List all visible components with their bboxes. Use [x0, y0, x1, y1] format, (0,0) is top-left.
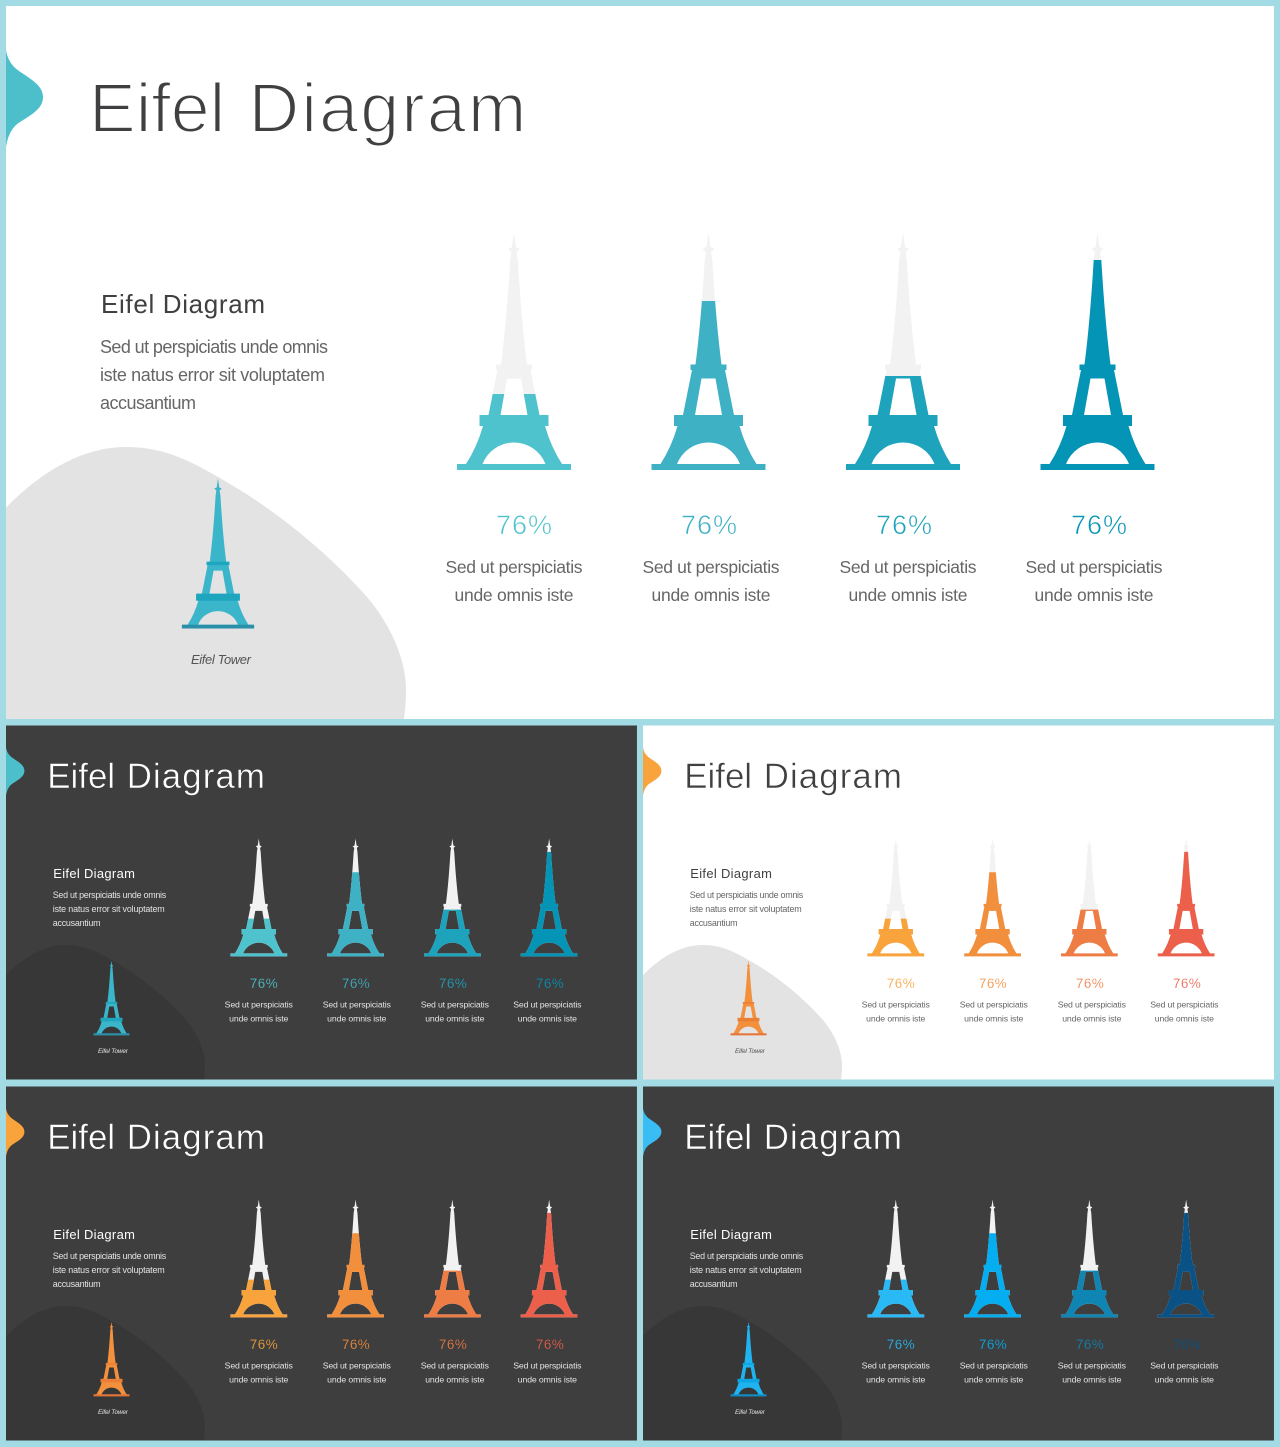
background blob [640, 1306, 842, 1444]
tower labels: unde omnis iste [1155, 1375, 1214, 1385]
tower labels [225, 1002, 582, 1022]
subheading: Eifel Diagram [690, 1227, 772, 1242]
values: 76% [681, 510, 737, 540]
values: 76% [887, 1337, 915, 1352]
tower labels: Sed ut perspiciatis [225, 1361, 294, 1371]
tower labels: unde omnis iste [229, 1014, 289, 1024]
title: Eifel Diagram [47, 1118, 266, 1157]
tower 2 [652, 233, 766, 470]
description text: iste natus error sit voluptatem [690, 1265, 802, 1275]
tower labels: unde omnis iste [518, 1375, 577, 1385]
title: Eifel Diagram [684, 757, 903, 796]
tower labels: Sed ut perspiciatis [323, 1361, 392, 1371]
values: 76% [1071, 510, 1127, 540]
description text: Sed ut perspiciatis unde omnis [690, 890, 804, 900]
tower labels: unde omnis iste [652, 585, 770, 605]
tower labels: Sed ut perspiciatis [1058, 1361, 1127, 1371]
tower labels: Sed ut perspiciatis [225, 1000, 294, 1010]
tower 2 [964, 838, 1021, 956]
tower 2 [327, 838, 384, 956]
description text: iste natus error sit voluptatem [100, 365, 325, 385]
tower labels: unde omnis iste [1034, 585, 1154, 605]
tower 4 [1040, 233, 1154, 470]
tower 1 [230, 1199, 287, 1317]
icon: small tower [94, 1322, 129, 1396]
panel: white orange slide [640, 726, 1274, 1083]
values: 76% [439, 976, 467, 991]
icon: small tower [182, 478, 254, 629]
description text: accusantium [690, 1279, 738, 1289]
icon: small tower [731, 961, 766, 1035]
subheading: Eifel Diagram [53, 1227, 135, 1242]
tower labels: Sed ut perspiciatis [1150, 1000, 1219, 1010]
tower 1 [457, 233, 571, 470]
tower labels: Sed ut perspiciatis [862, 1000, 931, 1010]
tower labels: unde omnis iste [964, 1375, 1024, 1385]
tower labels [862, 1000, 1219, 1024]
description text [100, 337, 328, 413]
panel: dark orange slide [3, 1086, 637, 1444]
tower labels: unde omnis iste [425, 1014, 485, 1024]
caption: Eifel Tower [98, 1048, 129, 1055]
background blob [640, 945, 842, 1083]
tower labels [446, 560, 1162, 601]
tower labels: Sed ut perspiciatis [421, 1000, 490, 1010]
subheading: Eifel Diagram [101, 289, 265, 319]
tower labels: Sed ut perspiciatis [862, 1361, 931, 1371]
tower 2 [327, 1199, 384, 1317]
tower labels [225, 1361, 582, 1385]
title: Eifel Diagram [89, 69, 529, 147]
tower labels: unde omnis iste [327, 1014, 387, 1024]
description text [53, 1251, 167, 1289]
values: 76% [536, 1337, 564, 1352]
background blob [0, 447, 406, 725]
notch tab [6, 1108, 24, 1157]
description text [690, 1251, 804, 1289]
icon: small tower [94, 961, 129, 1035]
tower 3 [424, 1199, 481, 1317]
values [250, 1337, 564, 1352]
values: 76% [342, 1337, 370, 1352]
tower labels: Sed ut perspiciatis [840, 557, 977, 577]
description text: Sed ut perspiciatis unde omnis [53, 890, 167, 900]
tower 1 [867, 1199, 924, 1317]
tower 1 [867, 838, 924, 956]
tower labels: unde omnis iste [866, 1375, 926, 1385]
notch tab [6, 747, 24, 796]
tower labels: Sed ut perspiciatis [1150, 1361, 1219, 1371]
tower 4 [521, 1199, 577, 1317]
values: 76% [342, 976, 370, 991]
tower labels: Sed ut perspiciatis [1058, 1000, 1127, 1010]
values: 76% [1173, 976, 1201, 991]
tower labels: unde omnis iste [454, 585, 574, 605]
tower labels: Sed ut perspiciatis [1026, 557, 1163, 577]
values [887, 1337, 1201, 1352]
values: 76% [439, 1337, 467, 1352]
values: 76% [1076, 1337, 1104, 1352]
values [887, 976, 1201, 991]
tower labels: unde omnis iste [327, 1375, 387, 1385]
tower labels: unde omnis iste [518, 1014, 577, 1024]
tower 3 [1061, 838, 1118, 956]
tower 1 [230, 838, 287, 956]
tower 4 [521, 838, 577, 956]
tower labels: unde omnis iste [1155, 1014, 1214, 1024]
subheading: Eifel Diagram [690, 866, 772, 881]
tower 3 [424, 838, 481, 956]
description text: iste natus error sit voluptatem [53, 904, 165, 914]
description text: accusantium [690, 918, 738, 928]
description text: accusantium [53, 1279, 101, 1289]
values: 76% [979, 1337, 1007, 1352]
tower labels: Sed ut perspiciatis [960, 1361, 1029, 1371]
values: 76% [496, 510, 552, 540]
description text: accusantium [53, 918, 101, 928]
tower labels: Sed ut perspiciatis [513, 1000, 582, 1010]
background blob [3, 1306, 205, 1444]
caption: Eifel Tower [191, 652, 252, 667]
tower 4 [1158, 838, 1214, 956]
description text: accusantium [100, 393, 196, 413]
values: 76% [1173, 1337, 1201, 1352]
values: 76% [536, 976, 564, 991]
tower 4 [1158, 1199, 1214, 1317]
description text: Sed ut perspiciatis unde omnis [100, 337, 328, 357]
description text [53, 890, 167, 928]
tower labels: Sed ut perspiciatis [642, 557, 780, 577]
panel: main white slide [0, 6, 1274, 725]
title: Eifel Diagram [684, 1118, 903, 1157]
description text: Sed ut perspiciatis unde omnis [53, 1251, 167, 1261]
values: 76% [250, 976, 278, 991]
values [250, 978, 564, 988]
tower 3 [1061, 1199, 1118, 1317]
tower labels: unde omnis iste [229, 1375, 289, 1385]
values: 76% [979, 976, 1007, 991]
values: 76% [887, 976, 915, 991]
notch tab [643, 1108, 661, 1157]
values [498, 515, 1126, 534]
subheading: Eifel Diagram [53, 866, 135, 881]
tower labels: Sed ut perspiciatis [323, 1000, 392, 1010]
tower labels: unde omnis iste [848, 585, 968, 605]
tower labels: unde omnis iste [964, 1014, 1024, 1024]
description text [690, 890, 804, 928]
description text: iste natus error sit voluptatem [53, 1265, 165, 1275]
tower labels: Sed ut perspiciatis [446, 557, 583, 577]
values: 76% [250, 1337, 278, 1352]
panel: dark blue slide [640, 1086, 1274, 1444]
description text: iste natus error sit voluptatem [690, 904, 802, 914]
tower labels: unde omnis iste [1062, 1014, 1122, 1024]
background blob [3, 945, 205, 1083]
caption: Eifel Tower [98, 1409, 129, 1416]
tower labels: Sed ut perspiciatis [513, 1361, 582, 1371]
tower labels: unde omnis iste [1062, 1375, 1122, 1385]
tower 2 [964, 1199, 1021, 1317]
tower labels: Sed ut perspiciatis [421, 1361, 490, 1371]
values: 76% [1076, 976, 1104, 991]
tower labels: unde omnis iste [866, 1014, 926, 1024]
values: 76% [876, 510, 932, 540]
title: Eifel Diagram [47, 757, 266, 796]
caption: Eifel Tower [735, 1048, 766, 1055]
notch tab [6, 50, 43, 147]
panel: dark teal slide [3, 726, 637, 1083]
icon: small tower [731, 1322, 766, 1396]
tower labels: Sed ut perspiciatis [960, 1000, 1029, 1010]
tower 3 [846, 233, 960, 470]
tower labels: unde omnis iste [425, 1375, 485, 1385]
description text: Sed ut perspiciatis unde omnis [690, 1251, 804, 1261]
notch tab [643, 747, 661, 796]
tower labels [862, 1361, 1219, 1385]
caption: Eifel Tower [735, 1409, 766, 1416]
